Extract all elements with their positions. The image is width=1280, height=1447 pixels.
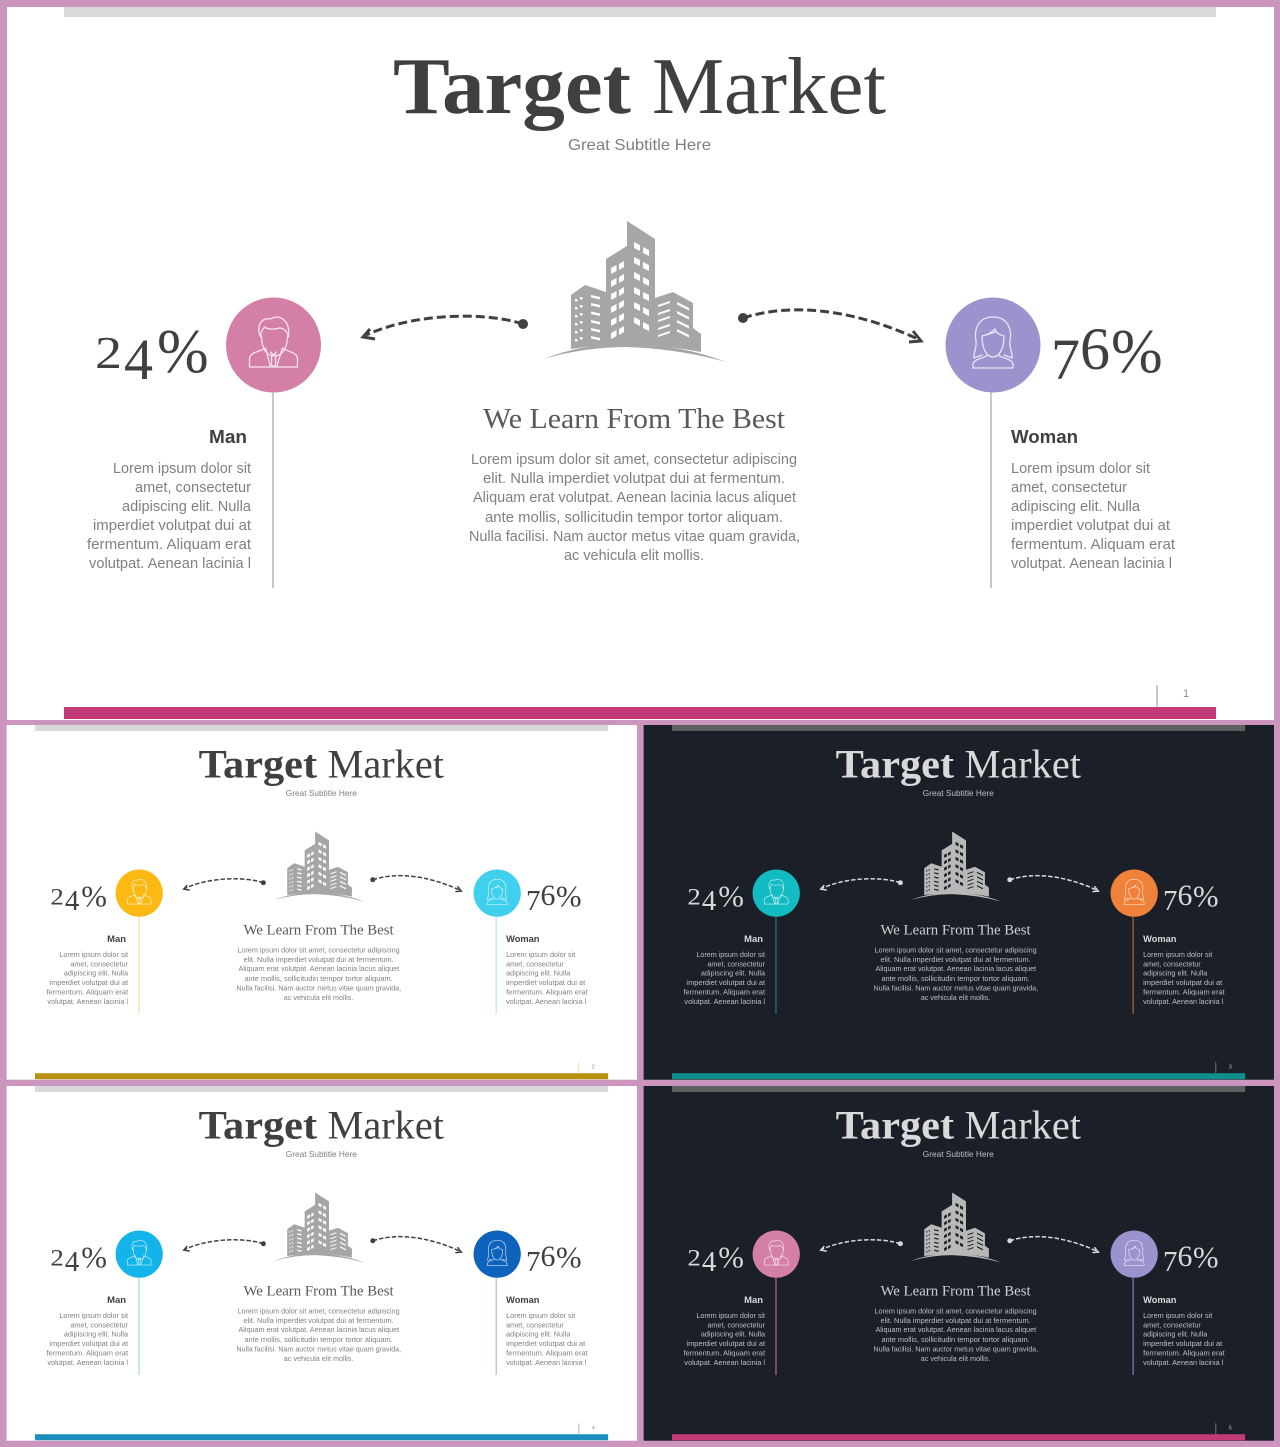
- icon: woman in circle: [1111, 870, 1158, 917]
- icon: city buildings: [273, 831, 364, 902]
- panel: light slide, sky blue and royal blue: [7, 1086, 637, 1441]
- text block: man: volutpat. Aenean lacinia l: [89, 555, 251, 572]
- text block: center: ac vehicula elit mollis.: [284, 993, 353, 1002]
- text block: man: [46, 950, 129, 1006]
- text block: man: fermentum. Aliquam erat: [46, 1349, 129, 1358]
- heading: center: We Learn From The Best: [880, 1283, 1031, 1299]
- text block: woman: imperdiet volutpat dui at: [1143, 978, 1223, 987]
- text block: woman: Lorem ipsum dolor sit: [506, 1311, 576, 1320]
- text block: man: amet, consectetur: [707, 959, 766, 968]
- text block: man: imperdiet volutpat dui at: [49, 1339, 129, 1348]
- text block: man: fermentum. Aliquam erat: [683, 1349, 766, 1358]
- heading: center: We Learn From The Best: [483, 403, 785, 435]
- arrow: to man segment: [821, 879, 903, 890]
- text block: center: Nulla facilisi. Nam auctor metus vitae quam gravida,: [873, 1345, 1038, 1354]
- text block: center: ante mollis, sollicitudin tempor tortor aliquam.: [881, 1335, 1030, 1344]
- page number: [1216, 1062, 1232, 1073]
- text block: woman: Lorem ipsum dolor sit: [1143, 1311, 1213, 1320]
- percentage: woman: %: [1193, 1241, 1219, 1275]
- icon: city buildings: [543, 221, 726, 362]
- arrow: to woman segment: [370, 1237, 461, 1253]
- percentage: woman: 6: [1080, 316, 1110, 382]
- percentage: woman: %: [1111, 318, 1163, 386]
- percentage: woman: 6: [1177, 1240, 1192, 1273]
- subtitle: Great Subtitle Here: [568, 137, 711, 154]
- page number: 5: [1229, 1425, 1232, 1431]
- percentage: woman: 7: [526, 885, 540, 917]
- panel: main slide, light theme, pink and lavender: [7, 7, 1274, 720]
- icon: woman in circle: [474, 1231, 521, 1278]
- connector line: man: [138, 1278, 140, 1375]
- text block: woman: fermentum. Aliquam erat: [1011, 536, 1176, 553]
- title: Target: [199, 1104, 318, 1148]
- percentage: man: %: [718, 880, 744, 914]
- text block: man: volutpat. Aenean lacinia l: [47, 997, 128, 1006]
- percentage: man: 2: [95, 327, 122, 378]
- title: [836, 1104, 1081, 1148]
- text block: woman: adipiscing elit. Nulla: [1011, 498, 1141, 515]
- text block: woman: [506, 1311, 589, 1367]
- icon: man in circle: [116, 1231, 163, 1278]
- page number: 2: [592, 1064, 595, 1070]
- page number: [579, 1062, 595, 1073]
- subtitle: Great Subtitle Here: [286, 789, 357, 798]
- connector line: man: [272, 392, 274, 588]
- text block: man: amet, consectetur: [70, 1320, 129, 1329]
- title: Target: [836, 743, 955, 787]
- text block: woman: fermentum. Aliquam erat: [1143, 1349, 1226, 1358]
- percentage: woman: 6: [540, 879, 555, 912]
- percentage: woman: 7: [1163, 885, 1177, 917]
- connector line: woman: [990, 392, 992, 588]
- text block: center: Aliquam erat volutpat. Aenean lacinia lacus aliquet: [875, 1325, 1037, 1334]
- text block: man: adipiscing elit. Nulla: [701, 1330, 766, 1339]
- connector line: man: [774, 917, 777, 1014]
- icon: woman in circle: [1111, 1231, 1158, 1278]
- label: man: Man: [107, 934, 126, 944]
- text block: center: Lorem ipsum dolor sit amet, consectetur adipiscing: [471, 451, 797, 468]
- percentage: woman: %: [556, 1241, 582, 1275]
- title: Target: [836, 1104, 955, 1148]
- text block: man: fermentum. Aliquam erat: [87, 536, 252, 553]
- text block: woman: imperdiet volutpat dui at: [506, 1339, 586, 1348]
- text block: center: [873, 1306, 1038, 1363]
- page number: 4: [592, 1425, 595, 1431]
- icon: man in circle: [753, 1231, 800, 1278]
- arrow: to man segment: [363, 316, 528, 339]
- text block: woman: Lorem ipsum dolor sit: [1011, 460, 1151, 477]
- text block: center: elit. Nulla imperdiet volutpat dui at fermentum.: [243, 955, 394, 964]
- text block: woman: fermentum. Aliquam erat: [1143, 988, 1226, 997]
- text block: center: [236, 1306, 401, 1363]
- text block: center: ante mollis, sollicitudin tempor tortor aliquam.: [881, 974, 1030, 983]
- text block: woman: amet, consectetur: [1143, 1320, 1201, 1329]
- text block: man: amet, consectetur: [70, 959, 129, 968]
- label: man: Man: [744, 1295, 763, 1305]
- text block: center: Nulla facilisi. Nam auctor metus vitae quam gravida,: [469, 528, 800, 545]
- text block: center: Nulla facilisi. Nam auctor metus vitae quam gravida,: [873, 984, 1038, 993]
- text block: man: adipiscing elit. Nulla: [64, 969, 129, 978]
- text block: center: Lorem ipsum dolor sit amet, consectetur adipiscing: [874, 1306, 1037, 1315]
- text block: woman: [1011, 460, 1176, 572]
- text block: man: [683, 1311, 766, 1367]
- text block: center: ante mollis, sollicitudin tempor tortor aliquam.: [244, 974, 393, 983]
- percentage: man: 2: [50, 885, 64, 910]
- title: [199, 1104, 444, 1148]
- title: Market: [328, 743, 444, 787]
- page number: 1: [1183, 688, 1189, 700]
- percentage: man: 4: [65, 885, 79, 917]
- text block: center: Nulla facilisi. Nam auctor metus vitae quam gravida,: [236, 1345, 401, 1354]
- text block: woman: adipiscing elit. Nulla: [506, 969, 571, 978]
- text block: woman: volutpat. Aenean lacinia l: [1143, 997, 1224, 1006]
- text block: woman: amet, consectetur: [1143, 959, 1201, 968]
- icon: woman in circle: [474, 870, 521, 917]
- text block: man: imperdiet volutpat dui at: [49, 978, 129, 987]
- page number: [1216, 1423, 1232, 1434]
- arrow: to woman segment: [1007, 1237, 1098, 1253]
- icon: city buildings: [273, 1192, 364, 1263]
- text block: woman: volutpat. Aenean lacinia l: [506, 1358, 587, 1367]
- icon: man in circle: [753, 870, 800, 917]
- text block: center: Lorem ipsum dolor sit amet, consectetur adipiscing: [237, 1306, 400, 1315]
- label: woman: Woman: [506, 934, 539, 944]
- connector line: woman: [495, 917, 497, 1014]
- connector line: woman: [1132, 1278, 1135, 1375]
- text block: center: ante mollis, sollicitudin tempor tortor aliquam.: [244, 1335, 393, 1344]
- text block: man: amet, consectetur: [135, 479, 251, 496]
- text block: man: Lorem ipsum dolor sit: [59, 950, 129, 959]
- arrow: to man segment: [184, 879, 266, 890]
- percentage: man: 4: [702, 1246, 716, 1278]
- panel: light slide, yellow and cyan: [7, 725, 637, 1080]
- text block: woman: [1143, 950, 1226, 1006]
- text block: man: fermentum. Aliquam erat: [46, 988, 129, 997]
- text block: center: [469, 451, 800, 564]
- connector line: man: [138, 917, 140, 1014]
- percentage: woman: 6: [540, 1240, 555, 1273]
- text block: woman: imperdiet volutpat dui at: [1143, 1339, 1223, 1348]
- text block: man: adipiscing elit. Nulla: [701, 969, 766, 978]
- text block: man: imperdiet volutpat dui at: [686, 1339, 766, 1348]
- text block: center: Aliquam erat volutpat. Aenean lacinia lacus aliquet: [473, 489, 797, 506]
- connector line: woman: [495, 1278, 497, 1375]
- text block: center: ac vehicula elit mollis.: [921, 993, 990, 1002]
- subtitle: Great Subtitle Here: [923, 1150, 994, 1159]
- text block: center: Aliquam erat volutpat. Aenean lacinia lacus aliquet: [238, 964, 400, 973]
- text block: man: [683, 950, 766, 1006]
- text block: woman: fermentum. Aliquam erat: [506, 1349, 589, 1358]
- percentage: woman: 7: [1051, 327, 1080, 392]
- heading: center: We Learn From The Best: [880, 922, 1031, 938]
- arrow: to man segment: [184, 1240, 266, 1251]
- text block: woman: volutpat. Aenean lacinia l: [506, 997, 587, 1006]
- text block: center: [873, 945, 1038, 1002]
- title: Market: [328, 1104, 444, 1148]
- text block: man: Lorem ipsum dolor sit: [113, 460, 252, 477]
- text block: center: elit. Nulla imperdiet volutpat dui at fermentum.: [880, 1316, 1031, 1325]
- title: Target: [199, 743, 318, 787]
- text block: center: Lorem ipsum dolor sit amet, consectetur adipiscing: [237, 945, 400, 954]
- icon: city buildings: [910, 1192, 1001, 1263]
- panel: dark slide, pink and lavender: [644, 1086, 1274, 1441]
- icon: man in circle: [116, 870, 163, 917]
- title: Market: [652, 43, 886, 131]
- label: man: Man: [107, 1295, 126, 1305]
- connector line: woman: [1132, 917, 1135, 1014]
- percentage: woman: 7: [526, 1246, 540, 1278]
- text block: woman: [1143, 1311, 1226, 1367]
- percentage: man: 2: [50, 1246, 64, 1271]
- arrow: to woman segment: [370, 876, 461, 892]
- arrow: to woman segment: [738, 310, 921, 342]
- icon: man in circle: [226, 298, 321, 392]
- text block: center: elit. Nulla imperdiet volutpat dui at fermentum.: [880, 955, 1031, 964]
- page number: [1157, 685, 1189, 707]
- text block: man: Lorem ipsum dolor sit: [696, 1311, 766, 1320]
- text block: woman: volutpat. Aenean lacinia l: [1143, 1358, 1224, 1367]
- label: man: Man: [209, 427, 247, 447]
- subtitle: Great Subtitle Here: [923, 789, 994, 798]
- text block: center: ante mollis, sollicitudin tempor tortor aliquam.: [485, 509, 783, 526]
- text block: woman: amet, consectetur: [506, 1320, 564, 1329]
- percentage: woman: 7: [1163, 1246, 1177, 1278]
- text block: center: elit. Nulla imperdiet volutpat dui at fermentum.: [483, 470, 785, 487]
- heading: center: We Learn From The Best: [243, 1283, 394, 1299]
- text block: center: ac vehicula elit mollis.: [564, 547, 704, 564]
- percentage: man: %: [718, 1241, 744, 1275]
- text block: man: [46, 1311, 129, 1367]
- text block: woman: adipiscing elit. Nulla: [1143, 1330, 1208, 1339]
- text block: center: [236, 945, 401, 1002]
- heading: center: We Learn From The Best: [243, 922, 394, 938]
- text block: man: fermentum. Aliquam erat: [683, 988, 766, 997]
- text block: woman: adipiscing elit. Nulla: [506, 1330, 571, 1339]
- label: woman: Woman: [1143, 934, 1176, 944]
- text block: man: volutpat. Aenean lacinia l: [47, 1358, 128, 1367]
- text block: center: ac vehicula elit mollis.: [921, 1354, 990, 1363]
- title: [836, 743, 1081, 787]
- percentage: man: 4: [65, 1246, 79, 1278]
- text block: woman: Lorem ipsum dolor sit: [1143, 950, 1213, 959]
- percentage: man: 2: [687, 885, 701, 910]
- text block: man: Lorem ipsum dolor sit: [59, 1311, 129, 1320]
- icon: woman in circle: [946, 298, 1040, 392]
- text block: center: Nulla facilisi. Nam auctor metus vitae quam gravida,: [236, 984, 401, 993]
- text block: center: Lorem ipsum dolor sit amet, consectetur adipiscing: [874, 945, 1037, 954]
- text block: man: Lorem ipsum dolor sit: [696, 950, 766, 959]
- text block: center: Aliquam erat volutpat. Aenean lacinia lacus aliquet: [875, 964, 1037, 973]
- connector line: man: [774, 1278, 777, 1375]
- text block: woman: imperdiet volutpat dui at: [1011, 517, 1171, 534]
- text block: man: [87, 460, 252, 572]
- text block: center: Aliquam erat volutpat. Aenean lacinia lacus aliquet: [238, 1325, 400, 1334]
- percentage: woman: %: [556, 880, 582, 914]
- text block: woman: fermentum. Aliquam erat: [506, 988, 589, 997]
- text block: woman: volutpat. Aenean lacinia l: [1011, 555, 1172, 572]
- label: woman: Woman: [506, 1295, 539, 1305]
- text block: man: adipiscing elit. Nulla: [64, 1330, 129, 1339]
- icon: city buildings: [910, 831, 1001, 902]
- page number: 3: [1229, 1064, 1232, 1070]
- label: man: Man: [744, 934, 763, 944]
- text block: woman: amet, consectetur: [506, 959, 564, 968]
- text block: woman: adipiscing elit. Nulla: [1143, 969, 1208, 978]
- title: Market: [965, 1104, 1081, 1148]
- title: Target: [393, 43, 631, 131]
- text block: man: imperdiet volutpat dui at: [686, 978, 766, 987]
- text block: woman: imperdiet volutpat dui at: [506, 978, 586, 987]
- subtitle: Great Subtitle Here: [286, 1150, 357, 1159]
- text block: man: amet, consectetur: [707, 1320, 766, 1329]
- label: woman: Woman: [1143, 1295, 1176, 1305]
- text block: center: ac vehicula elit mollis.: [284, 1354, 353, 1363]
- percentage: man: 4: [702, 885, 716, 917]
- percentage: man: %: [157, 318, 209, 386]
- page number: [579, 1423, 595, 1434]
- percentage: man: %: [81, 1241, 107, 1275]
- arrow: to man segment: [821, 1240, 903, 1251]
- panel: dark slide, teal and orange: [644, 725, 1274, 1080]
- text block: woman: Lorem ipsum dolor sit: [506, 950, 576, 959]
- text block: man: volutpat. Aenean lacinia l: [684, 1358, 765, 1367]
- title: Market: [965, 743, 1081, 787]
- text block: man: volutpat. Aenean lacinia l: [684, 997, 765, 1006]
- percentage: woman: %: [1193, 880, 1219, 914]
- percentage: man: 4: [124, 327, 153, 392]
- label: woman: Woman: [1011, 427, 1078, 447]
- text block: woman: amet, consectetur: [1011, 479, 1127, 496]
- text block: man: imperdiet volutpat dui at: [93, 517, 252, 534]
- percentage: man: %: [81, 880, 107, 914]
- text block: man: adipiscing elit. Nulla: [122, 498, 252, 515]
- text block: center: elit. Nulla imperdiet volutpat dui at fermentum.: [243, 1316, 394, 1325]
- text block: woman: [506, 950, 589, 1006]
- percentage: man: 2: [687, 1246, 701, 1271]
- arrow: to woman segment: [1007, 876, 1098, 892]
- percentage: woman: 6: [1177, 879, 1192, 912]
- title: [393, 43, 886, 131]
- title: [199, 743, 444, 787]
